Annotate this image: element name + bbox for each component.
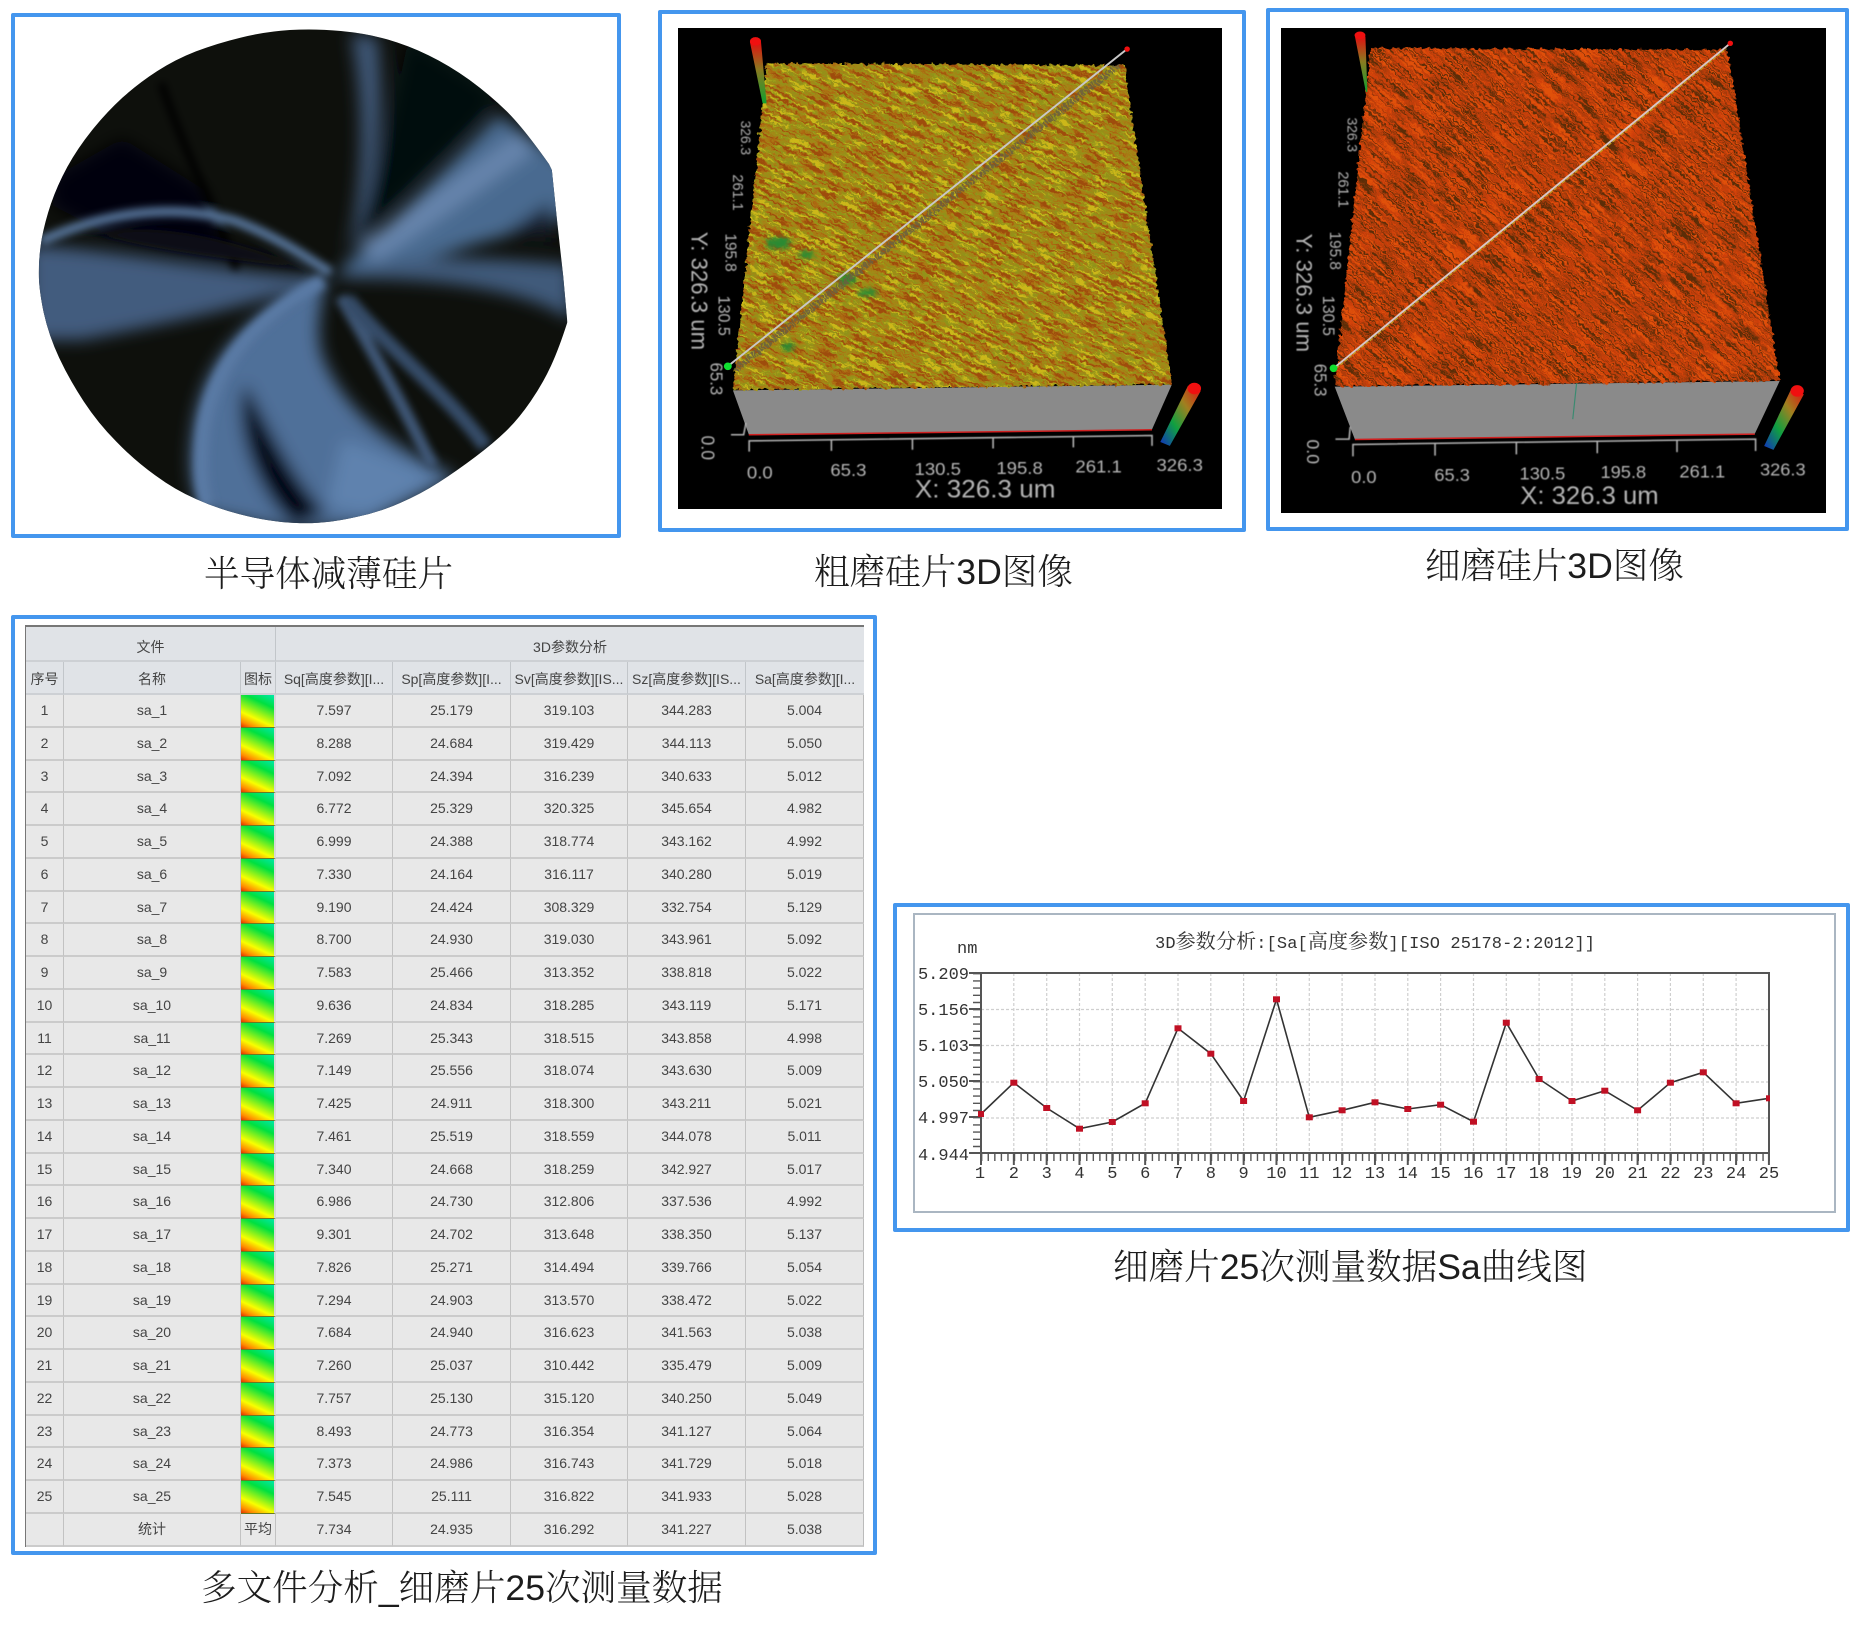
table data rows: 7.092 [316, 768, 352, 784]
table data rows: sa_12 [133, 1062, 171, 1078]
table data rows: 316.822 [544, 1488, 594, 1504]
image: rough surface 3D view: 261.1 [729, 174, 745, 211]
table data rows: 341.127 [661, 1422, 712, 1438]
table data rows: 24.940 [430, 1324, 473, 1340]
table statistics row: 5.038 [787, 1521, 822, 1537]
table data rows: sa_18 [133, 1259, 171, 1275]
table data rows: sa_25 [133, 1488, 171, 1504]
table data rows: 24.164 [430, 866, 473, 882]
table data rows: 14 [37, 1128, 52, 1144]
table data rows: 12 [37, 1062, 52, 1078]
table data rows: 13 [37, 1095, 52, 1111]
table data rows: 8.700 [316, 931, 352, 947]
table data rows: 7.425 [316, 1095, 352, 1111]
table statistics row: 平均 [244, 1521, 272, 1537]
colour scale bars [1355, 36, 1367, 92]
table data rows: 7.260 [316, 1357, 352, 1373]
image: fine surface 3D view: 65.3 [1310, 364, 1329, 397]
table data rows: 4.998 [787, 1030, 822, 1046]
table data rows: 8.288 [316, 735, 352, 751]
table data rows: 343.162 [661, 833, 712, 849]
table column header: 名称 [138, 671, 166, 687]
table data rows: 3 [41, 768, 48, 784]
x-axis labels: 9 [1238, 1165, 1249, 1184]
x-axis labels: 25 [1759, 1165, 1779, 1184]
table data rows: 24.730 [430, 1193, 473, 1209]
table data rows: sa_6 [137, 866, 167, 882]
table data rows: sa_5 [137, 833, 167, 849]
table data rows: 344.078 [661, 1128, 712, 1144]
caption: fine wafer: 细磨硅片3D图像 [1425, 546, 1684, 586]
table data rows: 24.911 [431, 1095, 472, 1111]
table data rows: 5.129 [787, 898, 822, 914]
table data rows: 338.818 [661, 964, 712, 980]
axes [731, 423, 1152, 452]
image: rough surface 3D view: 261.1 [1075, 456, 1122, 477]
image: rough surface 3D view: 326.3 [738, 121, 754, 155]
table data rows: 25.519 [430, 1128, 473, 1144]
image: fine surface 3D view [1281, 28, 1826, 513]
x-axis labels: 15 [1430, 1165, 1451, 1184]
table data rows: 25.329 [430, 800, 473, 816]
table data rows: sa_10 [133, 997, 171, 1013]
table data rows: 5.022 [787, 1292, 822, 1308]
image: fine surface 3D view: 326.3 [1344, 118, 1360, 152]
table data rows: 5.004 [787, 702, 822, 718]
table data rows: 313.570 [544, 1292, 594, 1308]
table data rows: 25.037 [430, 1357, 473, 1373]
table data rows: 22 [37, 1390, 52, 1406]
table data rows: 5.049 [787, 1390, 822, 1406]
table statistics row: 341.227 [661, 1521, 712, 1537]
table data rows: 5.064 [787, 1422, 822, 1438]
table data rows: sa_3 [137, 768, 167, 784]
table statistics row: 24.935 [430, 1521, 473, 1537]
table data rows: 7.294 [316, 1292, 352, 1308]
table data rows: 25.343 [430, 1030, 473, 1046]
image: rough surface 3D view: 326.3 [1156, 454, 1203, 475]
caption: rough wafer: 粗磨硅片3D图像 [814, 552, 1073, 592]
caption: chart: 细磨片25次测量数据Sa曲线图 [1113, 1247, 1587, 1287]
x-axis labels: 10 [1266, 1165, 1287, 1184]
table data rows: 7.545 [316, 1488, 352, 1504]
x-axis labels: 1 [975, 1165, 985, 1184]
table data rows: 335.479 [661, 1357, 712, 1373]
table data rows: 25.466 [430, 964, 473, 980]
table data rows: 24.668 [430, 1160, 473, 1176]
image: rough surface 3D view: 195.8 [721, 233, 739, 272]
table data rows: 25.111 [431, 1488, 472, 1504]
table data rows: 4 [41, 800, 48, 816]
image: fine surface 3D view: 261.1 [1334, 171, 1351, 208]
table data rows: 4.992 [787, 833, 822, 849]
table statistics row: 统计 [138, 1521, 166, 1537]
table data rows: 19 [37, 1292, 52, 1308]
table data rows: 316.743 [544, 1455, 594, 1471]
table data rows: 6.999 [316, 833, 352, 849]
y-axis labels: 4.944 [918, 1147, 969, 1166]
table data rows: 24.903 [430, 1292, 473, 1308]
table data rows: 5.011 [788, 1128, 822, 1144]
table data rows: 314.494 [544, 1259, 594, 1275]
table data rows: 8 [41, 931, 48, 947]
table data rows: 24.930 [430, 931, 473, 947]
table data rows: sa_24 [133, 1455, 171, 1471]
image: rough surface 3D view: 195.8 [996, 457, 1043, 478]
table data rows: sa_23 [133, 1422, 171, 1438]
image: rough surface 3D view: X: 326.3 um [915, 476, 1055, 503]
table statistics row: 316.292 [544, 1521, 594, 1537]
table data rows: 1 [41, 702, 48, 718]
table data rows: 316.117 [544, 866, 594, 882]
table data rows: 319.429 [544, 735, 594, 751]
table data rows: 9 [41, 964, 48, 980]
table data rows: 9.636 [316, 997, 352, 1013]
measurement diagonal line [728, 49, 1127, 366]
table data rows: 313.648 [544, 1226, 594, 1242]
table data rows: 4.982 [787, 800, 822, 816]
table data rows: 6.986 [316, 1193, 352, 1209]
table data rows: 5.009 [787, 1062, 822, 1078]
table data rows: sa_9 [137, 964, 167, 980]
panel: fine ground wafer 3D image [1266, 8, 1849, 531]
x-axis labels: 2 [1009, 1165, 1019, 1184]
axes [1335, 427, 1756, 456]
table data rows: 344.113 [662, 735, 711, 751]
table data rows: 341.563 [661, 1324, 712, 1340]
table data rows: 7.826 [316, 1259, 352, 1275]
table data rows: 5.038 [787, 1324, 822, 1340]
table data rows: sa_7 [137, 898, 167, 914]
table data rows: 25.130 [430, 1390, 473, 1406]
table group header: 文件 [136, 639, 164, 655]
measurement diagonal line [1336, 49, 1726, 368]
table data rows: 7.340 [316, 1160, 352, 1176]
panel: rough ground wafer 3D image [658, 10, 1246, 532]
textured surface [732, 62, 1172, 392]
table data rows: 8.493 [316, 1422, 352, 1438]
table data rows: 6.772 [316, 800, 352, 816]
y-axis labels [918, 966, 969, 1166]
x-axis labels: 21 [1627, 1165, 1648, 1184]
line chart: Sa over 25 measurements [913, 913, 1836, 1213]
table data rows: 5.019 [787, 866, 822, 882]
table data rows: 20 [37, 1324, 52, 1340]
table data rows: 25 [37, 1488, 52, 1504]
table data rows: 5.137 [787, 1226, 822, 1242]
table data rows: 310.442 [544, 1357, 594, 1373]
image: rough surface 3D view: 65.3 [830, 459, 866, 480]
table data rows: 10 [37, 997, 52, 1013]
table column header: Sq[高度参数][I... [284, 671, 384, 687]
x-axis labels [975, 1165, 1779, 1184]
table data rows: 5.054 [787, 1259, 822, 1275]
table data rows: sa_13 [133, 1095, 171, 1111]
image: fine surface 3D view: X: 326.3 um [1520, 482, 1659, 510]
x-axis labels: 7 [1173, 1165, 1183, 1184]
table data rows: 316.239 [544, 768, 594, 784]
table data rows: 319.030 [544, 931, 594, 947]
table data rows [26, 695, 864, 1514]
table data rows: sa_21 [133, 1357, 171, 1373]
table data rows: 24.702 [430, 1226, 473, 1242]
table data rows: sa_17 [133, 1226, 171, 1242]
table data rows: 4.992 [787, 1193, 822, 1209]
image: rough surface 3D view: Y: 326.3 um [686, 232, 712, 350]
image: rough surface 3D view [678, 28, 1222, 509]
data line [981, 999, 1769, 1129]
table data rows: 11 [37, 1030, 52, 1046]
table data rows: sa_14 [133, 1128, 171, 1144]
table data rows: sa_11 [133, 1030, 171, 1046]
grey side wall [733, 385, 1172, 434]
table data rows: 16 [37, 1193, 52, 1209]
table data rows: 5.021 [787, 1095, 822, 1111]
table data rows: 9.301 [316, 1226, 352, 1242]
table group header [26, 627, 864, 662]
table data rows: 5.012 [787, 768, 822, 784]
table data rows: 24.388 [430, 833, 473, 849]
table data rows: 5.171 [787, 997, 822, 1013]
caption: wafer: 半导体减薄硅片 [204, 554, 453, 594]
x-axis labels: 19 [1562, 1165, 1582, 1184]
table column header [26, 662, 864, 695]
table data rows: 7.373 [316, 1455, 352, 1471]
table data rows: 18 [37, 1259, 52, 1275]
x-axis labels: 24 [1726, 1165, 1746, 1184]
table data rows: 24.684 [430, 735, 473, 751]
table statistics row: 7.734 [316, 1521, 352, 1537]
image: fine surface 3D view: 261.1 [1679, 462, 1725, 481]
image: rough surface 3D view: 65.3 [706, 363, 726, 395]
table data rows: 315.120 [544, 1390, 594, 1406]
table data rows: 320.325 [544, 800, 594, 816]
x-axis labels: 11 [1299, 1165, 1320, 1184]
table data rows: 24 [37, 1455, 52, 1471]
y-axis labels: 5.103 [918, 1038, 969, 1057]
image: fine surface 3D view: 130.5 [1319, 296, 1337, 336]
y-axis unit: nm [957, 940, 977, 959]
table data rows: 338.350 [661, 1226, 712, 1242]
table column header: 序号 [30, 671, 58, 687]
table data rows: 343.858 [661, 1030, 712, 1046]
table data rows: 5.022 [787, 964, 822, 980]
table data rows: 340.280 [661, 866, 712, 882]
table data rows: sa_8 [137, 931, 167, 947]
y-axis labels: 5.209 [918, 966, 969, 985]
table data rows: 23 [37, 1422, 52, 1438]
table column header: Sp[高度参数][I... [401, 671, 502, 687]
y-axis labels: 5.156 [918, 1002, 969, 1021]
y-axis labels: 4.997 [918, 1110, 969, 1129]
image: fine surface 3D view: 65.3 [1434, 465, 1470, 485]
x-axis labels: 6 [1140, 1165, 1150, 1184]
table data rows: 7.269 [316, 1030, 352, 1046]
table data rows: 7.684 [316, 1324, 352, 1340]
x-axis labels: 23 [1693, 1165, 1714, 1184]
y-axis labels: 5.050 [918, 1074, 969, 1093]
x-axis labels: 17 [1496, 1165, 1517, 1184]
x-axis labels: 12 [1332, 1165, 1352, 1184]
table data rows: 5.017 [787, 1160, 822, 1176]
table data rows: 337.536 [661, 1193, 712, 1209]
table data rows: 318.515 [544, 1030, 594, 1046]
table data rows: 318.259 [544, 1160, 594, 1176]
chart title: 3D参数分析:[Sa[高度参数][ISO 25178-2:2012]] [1155, 930, 1595, 955]
table data rows: 25.179 [430, 702, 473, 718]
x-axis labels: 22 [1660, 1165, 1681, 1184]
x-axis labels: 4 [1074, 1165, 1085, 1184]
table data rows: 5 [41, 833, 48, 849]
table data rows: 316.623 [544, 1324, 594, 1340]
x-axis labels: 13 [1365, 1165, 1385, 1184]
table data rows: 7.461 [316, 1128, 352, 1144]
table data rows: 24.834 [430, 997, 473, 1013]
table data rows: sa_22 [133, 1390, 171, 1406]
table data rows: 5.009 [787, 1357, 822, 1373]
table data rows: 319.103 [544, 702, 594, 718]
table data rows: 308.329 [544, 898, 594, 914]
image: fine surface 3D view: Y: 326.3 um [1291, 234, 1317, 352]
x-axis labels: 18 [1529, 1165, 1549, 1184]
image: fine surface 3D view: 195.8 [1600, 462, 1646, 482]
image: fine surface 3D view: 195.8 [1326, 232, 1343, 270]
table data rows: 15 [37, 1160, 52, 1176]
x-axis labels: 5 [1107, 1165, 1117, 1184]
table data rows: 341.729 [661, 1455, 712, 1471]
table data rows: sa_16 [133, 1193, 171, 1209]
image: fine surface 3D view: 0.0 [1303, 440, 1323, 464]
panel: multi-file analysis table [11, 615, 877, 1555]
table data rows: 318.074 [544, 1062, 594, 1078]
table data rows: 318.300 [544, 1095, 594, 1111]
table data rows: sa_4 [137, 800, 167, 816]
table data rows: 344.283 [661, 702, 712, 718]
table data rows: 340.250 [661, 1390, 712, 1406]
table data rows: 313.352 [544, 964, 594, 980]
table data rows: 7.757 [316, 1390, 352, 1406]
x-axis labels: 8 [1206, 1165, 1216, 1184]
table data rows: 343.211 [662, 1095, 711, 1111]
table data rows: 339.766 [661, 1259, 712, 1275]
panel: thinned semiconductor wafer photo [11, 13, 621, 538]
x-axis labels: 3 [1042, 1165, 1052, 1184]
image: rough surface 3D view: 130.5 [915, 458, 961, 479]
table column header: Sa[高度参数][I... [755, 671, 855, 687]
table data rows: 24.773 [430, 1422, 473, 1438]
table data rows: 9.190 [316, 898, 352, 914]
plot frame and ticks [975, 972, 1770, 1159]
table data rows: 24.424 [430, 898, 473, 914]
x-axis labels: 20 [1595, 1165, 1615, 1184]
table data rows: 25.271 [430, 1259, 473, 1275]
table data rows: 332.754 [661, 898, 712, 914]
table data rows: 318.559 [544, 1128, 594, 1144]
table data rows: sa_1 [137, 702, 167, 718]
x-axis labels: 16 [1463, 1165, 1484, 1184]
image: fine surface 3D view: 130.5 [1520, 463, 1565, 483]
table column header: Sv[高度参数][IS... [515, 671, 623, 687]
table data rows: 7.330 [316, 866, 352, 882]
table data rows: 345.654 [661, 800, 712, 816]
image: fine surface 3D view: 0.0 [1351, 467, 1377, 487]
table data rows: 7.149 [316, 1062, 352, 1078]
table statistics row [26, 1514, 864, 1547]
table data rows: 340.633 [661, 768, 712, 784]
table: 25 measurements [25, 625, 864, 1547]
image: rough surface 3D view: 0.0 [747, 462, 773, 482]
table data rows: 24.394 [430, 768, 473, 784]
table data rows: 343.961 [661, 931, 712, 947]
image: fine surface 3D view: 326.3 [1760, 460, 1806, 479]
table data rows: sa_2 [137, 735, 167, 751]
table data rows: 21 [37, 1357, 52, 1373]
textured surface [1333, 46, 1780, 388]
table data rows: 338.472 [661, 1292, 712, 1308]
x-axis labels: 14 [1398, 1165, 1418, 1184]
table data rows: 7.583 [316, 964, 352, 980]
table data rows: 341.933 [661, 1488, 712, 1504]
table data rows: 5.092 [787, 931, 822, 947]
table data rows: 2 [41, 735, 48, 751]
table data rows: 312.806 [544, 1193, 594, 1209]
table column header: Sz[高度参数][IS... [632, 671, 741, 687]
table data rows: 5.018 [787, 1455, 822, 1471]
table data rows: 24.986 [430, 1455, 473, 1471]
image: rough surface 3D view: 0.0 [698, 436, 718, 460]
table data rows: 343.119 [662, 997, 711, 1013]
table data rows: 318.285 [544, 997, 594, 1013]
table group header: 3D参数分析 [533, 639, 607, 655]
table column header: 图标 [244, 671, 272, 687]
grey side wall [1335, 381, 1780, 440]
panel: Sa line chart [893, 903, 1850, 1232]
table data rows: 7.597 [316, 702, 352, 718]
data markers [978, 996, 1770, 1132]
table data rows: 5.050 [787, 735, 822, 751]
image: rough surface 3D view: 130.5 [714, 296, 733, 336]
table data rows: 6 [41, 866, 48, 882]
table data rows: 342.927 [661, 1160, 712, 1176]
colour scale bars [750, 42, 767, 103]
caption: table: 多文件分析_细磨片25次测量数据 [201, 1568, 723, 1608]
table data rows: 343.630 [661, 1062, 712, 1078]
table data rows: sa_20 [133, 1324, 171, 1340]
table data rows: 25.556 [430, 1062, 473, 1078]
table data rows: 17 [37, 1226, 52, 1242]
table data rows: sa_19 [133, 1292, 171, 1308]
table data rows: 316.354 [544, 1422, 594, 1438]
table data rows: 5.028 [787, 1488, 822, 1504]
table data rows: 318.774 [544, 833, 594, 849]
table data rows: 7 [41, 898, 48, 914]
image: wafer with swirl reflections [38, 30, 568, 524]
table data rows: sa_15 [133, 1160, 171, 1176]
